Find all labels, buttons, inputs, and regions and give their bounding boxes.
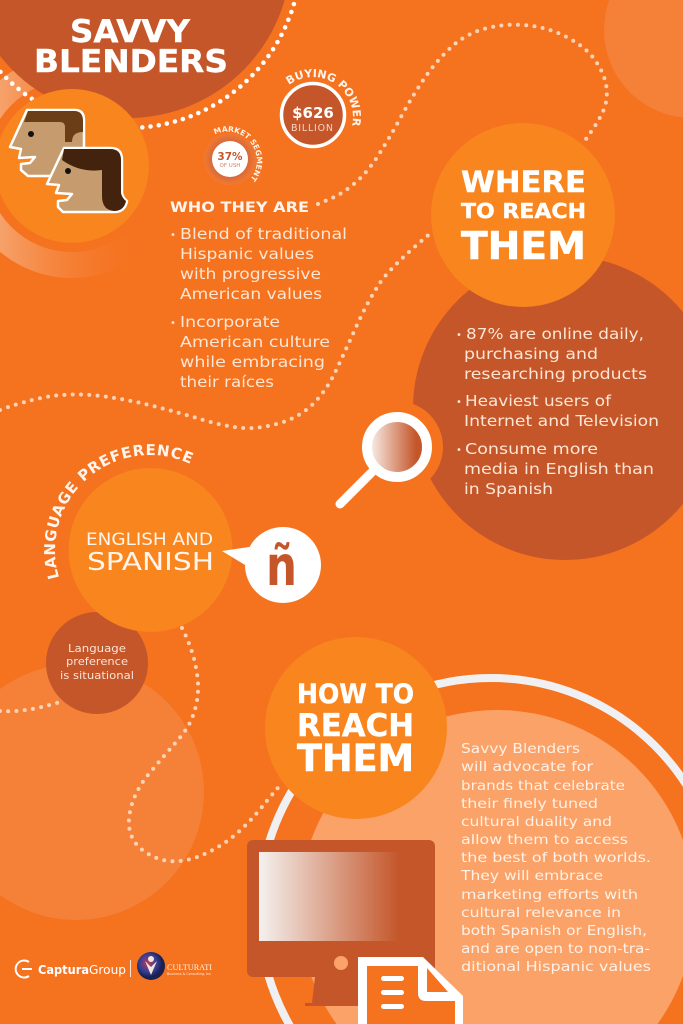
title circle: [0, 0, 291, 118]
text block: where to reach them: Heaviest users of: [465, 392, 612, 410]
dotted path: lower left: [0, 702, 60, 711]
buying power label: BUYING POWER: [286, 68, 362, 126]
market segment badge: [204, 126, 262, 185]
text block: where to reach them: Consume more: [465, 440, 598, 458]
icon: female face: [47, 148, 127, 212]
text block: where to reach them: Internet and Television: [464, 412, 659, 430]
text block: who they are: American values: [180, 285, 322, 303]
heading: who they are: WHO THEY ARE: [170, 200, 309, 216]
language circle: SPANISH: [87, 547, 214, 576]
market segment label: MARKET SEGMENT: [214, 126, 262, 182]
panel: where to reach them background: [413, 256, 683, 560]
text block: where to reach them: in Spanish: [464, 480, 553, 498]
title: BLENDERS: [34, 44, 228, 80]
buying power badge: BILLION: [291, 123, 333, 134]
text block: how to reach them: their finely tuned: [461, 796, 598, 812]
decorative circle: top right: [604, 0, 683, 118]
language circle: [68, 468, 232, 632]
text block: where to reach them: •: [456, 445, 462, 456]
faces medallion: [0, 89, 149, 243]
text block: where to reach them: [456, 325, 659, 498]
icon: speech bubble with ñ: ñ: [266, 534, 297, 598]
text block: how to reach them: [460, 741, 651, 975]
text block: who they are: Incorporate: [180, 313, 280, 331]
language preference label: LANGUAGE PREFERENCE: [44, 444, 194, 580]
icon: male face: [10, 110, 84, 176]
ring: [259, 678, 683, 1024]
text block: how to reach them: will advocate for: [461, 759, 594, 775]
heading circle: how to reach them: [265, 637, 447, 819]
text block: how to reach them: allow them to access: [461, 832, 628, 848]
text block: who they are: Blend of traditional: [180, 225, 347, 243]
icon: speech bubble with ñ: [222, 527, 321, 603]
text block: how to reach them: cultural relevance in: [461, 905, 621, 921]
heading circle: how to reach them: THEM: [297, 737, 414, 780]
inner panel circle: [299, 710, 683, 1024]
text block: who they are: [170, 225, 347, 391]
band around faces circle: [0, 80, 158, 252]
text block: how to reach them: and are open to non-tra-: [461, 941, 650, 957]
logo: Culturati: Business & Consulting, Inc.: [167, 972, 212, 976]
language situational circle: preference: [66, 655, 128, 668]
dotted path: middle wave: [0, 232, 432, 428]
text block: how to reach them: marketing efforts with: [461, 887, 638, 903]
text block: where to reach them: media in English than: [464, 460, 654, 478]
text block: who they are: while embracing: [180, 353, 325, 371]
text block: who they are: American culture: [180, 333, 330, 351]
text block: where to reach them: researching products: [464, 365, 647, 383]
icon: document: [358, 957, 463, 1024]
logo: Culturati: [137, 952, 212, 980]
text block: how to reach them: They will embrace: [460, 868, 603, 884]
logo: CapturaGroup: Captura: [38, 962, 89, 977]
heading circle: where to reach them: TO REACH: [461, 199, 586, 223]
text block: who they are: their raíces: [180, 373, 274, 391]
text block: who they are: •: [170, 318, 176, 329]
buying power badge: [280, 68, 362, 148]
icon: magnifying glass: [340, 401, 443, 504]
text block: where to reach them: purchasing and: [464, 345, 598, 363]
text block: how to reach them: cultural duality and: [461, 814, 612, 830]
icon: monitor: [247, 840, 435, 1006]
dotted path: top right loop: [318, 25, 607, 204]
text block: where to reach them: •: [456, 397, 462, 408]
text block: how to reach them: the best of both worlds.: [461, 850, 651, 866]
text block: where to reach them: •: [456, 330, 462, 341]
heading circle: how to reach them: REACH: [297, 708, 414, 744]
text block: who they are: Hispanic values: [180, 245, 314, 263]
language situational circle: is situational: [60, 669, 134, 682]
text block: who they are: •: [170, 230, 176, 241]
panel: how to reach them: [259, 678, 683, 1024]
title: SAVVY: [70, 14, 191, 50]
dotted arc around title: [0, 0, 301, 128]
decorative circle: lower left: [0, 664, 204, 920]
heading circle: where to reach them: WHERE: [461, 165, 586, 199]
text block: where to reach them: 87% are online daily,: [466, 325, 644, 343]
market segment badge: 37%: [217, 151, 243, 163]
language situational circle: Language: [68, 642, 126, 655]
language situational circle: [46, 612, 148, 714]
heading circle: where to reach them: [431, 123, 615, 307]
dotted path: lower: [129, 628, 282, 861]
logo: CapturaGroup: [16, 960, 131, 977]
text block: who they are: with progressive: [180, 265, 321, 283]
buying power badge: $626: [292, 104, 334, 122]
logo: CapturaGroup: Group: [89, 962, 126, 977]
title: [34, 14, 228, 80]
heading circle: how to reach them: HOW TO: [297, 679, 414, 710]
heading circle: where to reach them: THEM: [461, 224, 586, 268]
gradient ring behind faces: [0, 54, 184, 278]
text block: how to reach them: brands that celebrate: [461, 778, 625, 794]
language circle: ENGLISH AND: [86, 530, 213, 550]
text block: how to reach them: Savvy Blenders: [461, 741, 580, 757]
market segment badge: OF USH: [220, 163, 240, 169]
logo: Culturati: CULTURATI: [167, 963, 212, 972]
text block: how to reach them: ditional Hispanic values: [461, 959, 651, 975]
text block: how to reach them: both Spanish or English,: [461, 923, 647, 939]
faces circle: [0, 89, 149, 243]
